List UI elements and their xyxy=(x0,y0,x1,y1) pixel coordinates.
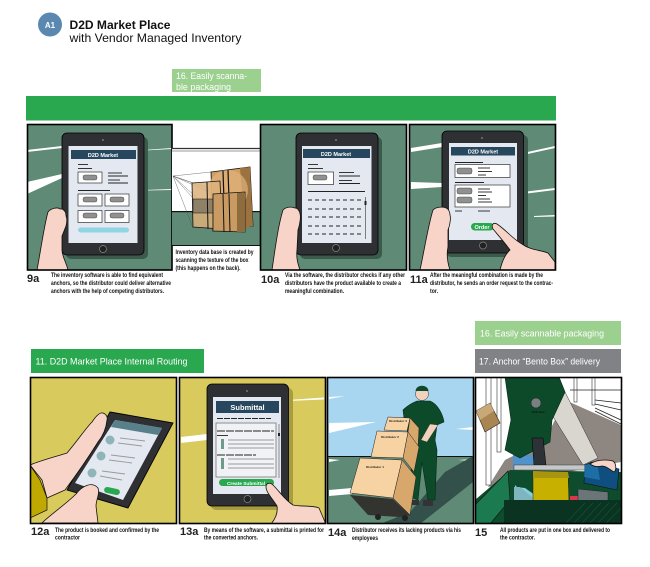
label 12a: 12a xyxy=(31,526,50,538)
caption: inventory data base: (this happens on the back). xyxy=(176,265,241,272)
label 15: 15 xyxy=(475,527,487,539)
badge: A1 xyxy=(38,12,62,36)
caption 15: the contractor. xyxy=(500,534,535,542)
panel 13a: submittal tablet xyxy=(179,377,326,524)
caption 10a: Via the software, the distributor checks if any other xyxy=(285,272,405,279)
panel 14a: distributor employee with hand truck: Distributor 3 xyxy=(389,419,407,423)
panel 15: bento box packing: D2D Box xyxy=(532,410,545,414)
tag: 11 D2D Market Place internal routing: 11. D2D Market Place Internal Routing xyxy=(36,356,188,368)
tag: 16 easily scannable packaging (top): 16. Easily scanna- xyxy=(176,71,247,82)
caption 13a: the converted anchors. xyxy=(204,534,258,542)
panel 14a: distributor employee with hand truck: Distributor 2 xyxy=(381,435,399,439)
panel 9a: tablet with alternative anchors: D2D Market xyxy=(88,153,118,159)
caption 14a: employees xyxy=(352,535,378,542)
panel 11a: order tablet: D2D Market xyxy=(468,150,498,156)
panel 14a: distributor employee with hand truck xyxy=(327,377,474,524)
panel 15: bento box packing xyxy=(475,377,622,524)
caption 14a xyxy=(352,527,461,542)
caption 14a: Distributor receives its lacking products via his xyxy=(352,527,461,534)
top green band xyxy=(26,96,556,120)
label 13a: 13a xyxy=(180,526,199,538)
caption: inventory data base: Inventory data base is created by xyxy=(176,249,254,256)
caption 13a xyxy=(204,527,324,542)
panel: scanning boxes xyxy=(172,148,261,246)
caption 12a xyxy=(55,527,159,542)
caption 15: All products are put in one box and delivered to xyxy=(500,527,610,534)
caption 10a: distributors have the product available to create a xyxy=(285,280,401,287)
title: D2D Market Place xyxy=(70,18,171,32)
caption 11a xyxy=(430,272,553,295)
tag: 17 anchor bento box delivery: 17. Anchor “Bento Box” delivery xyxy=(479,356,600,368)
panel 13a: submittal tablet: Create Submittal xyxy=(227,481,265,487)
tag: 11 D2D Market Place internal routing xyxy=(31,349,204,373)
caption: inventory data base xyxy=(176,249,254,272)
caption 10a xyxy=(285,272,405,295)
panel 13a: submittal tablet: Submittal xyxy=(230,403,265,412)
tag: 16 easily scannable packaging: 16. Easily scannable packaging xyxy=(480,328,604,340)
label 9a: 9a xyxy=(27,273,40,285)
caption 9a: anchors, so the distributor could deliver alternative xyxy=(51,280,171,287)
caption 11a: distributor, he sends an order request to the contrac- xyxy=(430,280,553,287)
label 11a: 11a xyxy=(410,274,429,286)
panel 14a: distributor employee with hand truck: Distributor 1 xyxy=(366,465,384,469)
caption 12a: contractor xyxy=(55,534,80,542)
tag: 16 easily scannable packaging (top) xyxy=(172,69,261,93)
label 10a: 10a xyxy=(261,274,280,286)
caption: inventory data base: scanning the texture of the box xyxy=(176,257,249,264)
caption 9a: The inventory software is able to find equivalent xyxy=(51,272,164,279)
caption 11a: tor. xyxy=(430,288,438,295)
caption 11a: After the meaningful combination is made by the xyxy=(430,272,543,279)
caption 13a: By means of the software, a submittal is printed for xyxy=(204,527,324,534)
title xyxy=(68,18,242,45)
panel 10a: distributor availability tablet: D2D Market xyxy=(321,152,351,158)
label 14a: 14a xyxy=(328,527,347,539)
panel 11a: order tablet: Order xyxy=(475,225,490,231)
caption 10a: meaningful combination. xyxy=(285,288,344,295)
tag: 16 easily scannable packaging xyxy=(475,321,621,345)
caption 12a: The product is booked and confirmed by the xyxy=(55,527,159,534)
panel 12a: contractor holding tablet xyxy=(30,377,177,524)
badge: A1: A1 xyxy=(45,21,56,30)
title: with Vendor Managed Inventory xyxy=(68,31,242,45)
caption 15 xyxy=(500,527,610,542)
panel 9a: tablet with alternative anchors xyxy=(27,124,172,270)
caption 9a xyxy=(51,272,171,295)
caption 9a: anchors with the help of competing distributors. xyxy=(51,288,164,295)
tag: 17 anchor bento box delivery xyxy=(475,349,621,373)
tag: 16 easily scannable packaging (top): ble packaging xyxy=(176,82,231,93)
panel 11a: order tablet xyxy=(409,124,556,270)
panel 10a: distributor availability tablet xyxy=(260,124,407,270)
